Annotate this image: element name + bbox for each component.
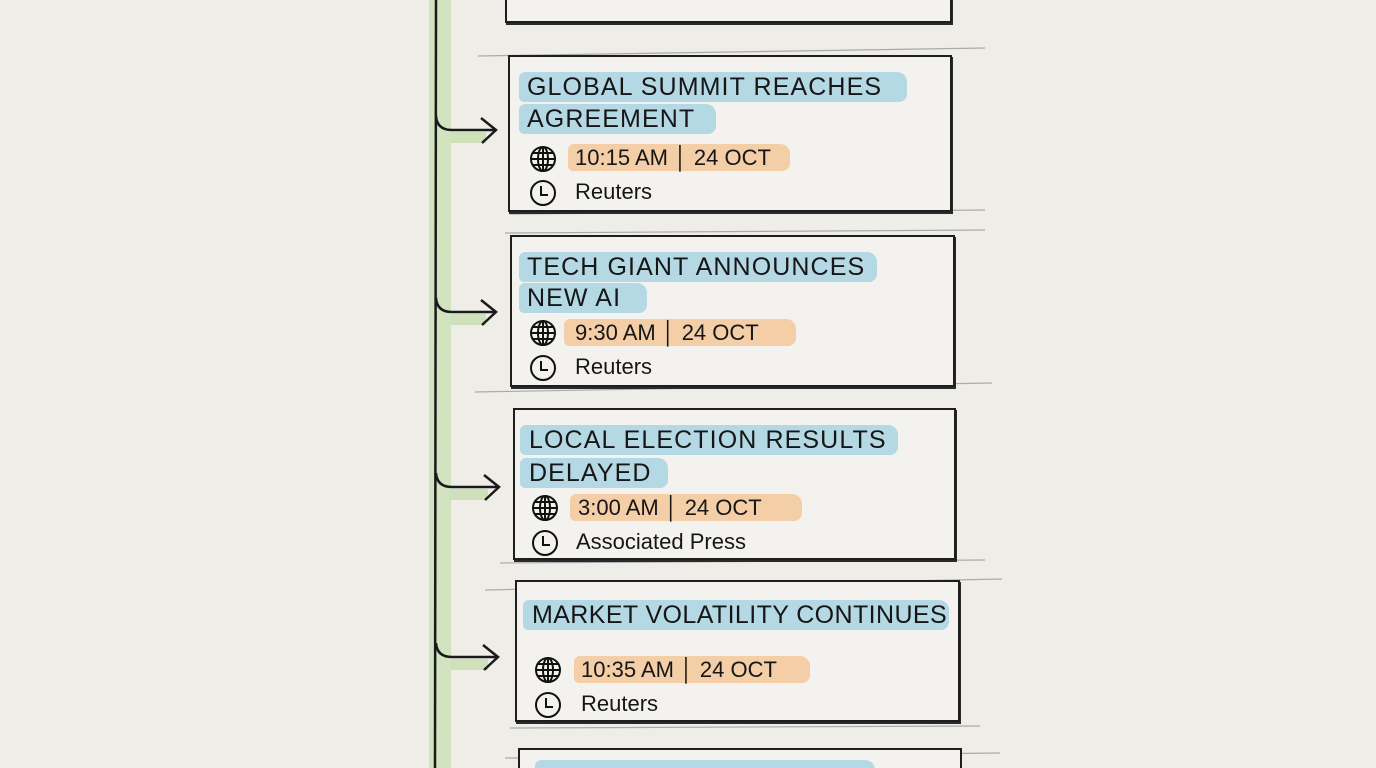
card 3: LOCAL ELECTION RESULTS [529, 426, 887, 454]
source [530, 180, 556, 206]
card 2: 9:30 AM │ 24 OCT [575, 320, 759, 345]
card 3: DELAYED [529, 459, 652, 487]
card 1: 10:15 AM │ 24 OCT [575, 145, 771, 170]
arrow 1 [436, 116, 496, 143]
title [519, 72, 907, 102]
card 1: Reuters [575, 179, 652, 204]
arrow 3 [436, 473, 499, 500]
card 1 [508, 55, 952, 212]
time row [568, 144, 790, 171]
card 3: 3:00 AM │ 24 OCT [578, 495, 762, 520]
card 0 partial [505, 0, 952, 23]
card 4 [515, 580, 960, 722]
card 3: Associated Press [576, 529, 746, 554]
card 4: 10:35 AM │ 24 OCT [581, 657, 777, 682]
arrow 4 [436, 643, 498, 670]
arrow 2 [436, 298, 496, 325]
card 2 [510, 235, 955, 387]
card 1: AGREEMENT [527, 105, 695, 133]
card 2: Reuters [575, 354, 652, 379]
card 5 partial [518, 748, 962, 768]
icon: globe [530, 146, 556, 172]
card 2: TECH GIANT ANNOUNCES [527, 253, 865, 281]
card 4: Reuters [581, 691, 658, 716]
card 2: NEW AI [527, 284, 621, 312]
card 4: MARKET VOLATILITY CONTINUES [532, 601, 947, 629]
card 3 [513, 408, 956, 560]
card 1: GLOBAL SUMMIT REACHES [527, 73, 882, 101]
